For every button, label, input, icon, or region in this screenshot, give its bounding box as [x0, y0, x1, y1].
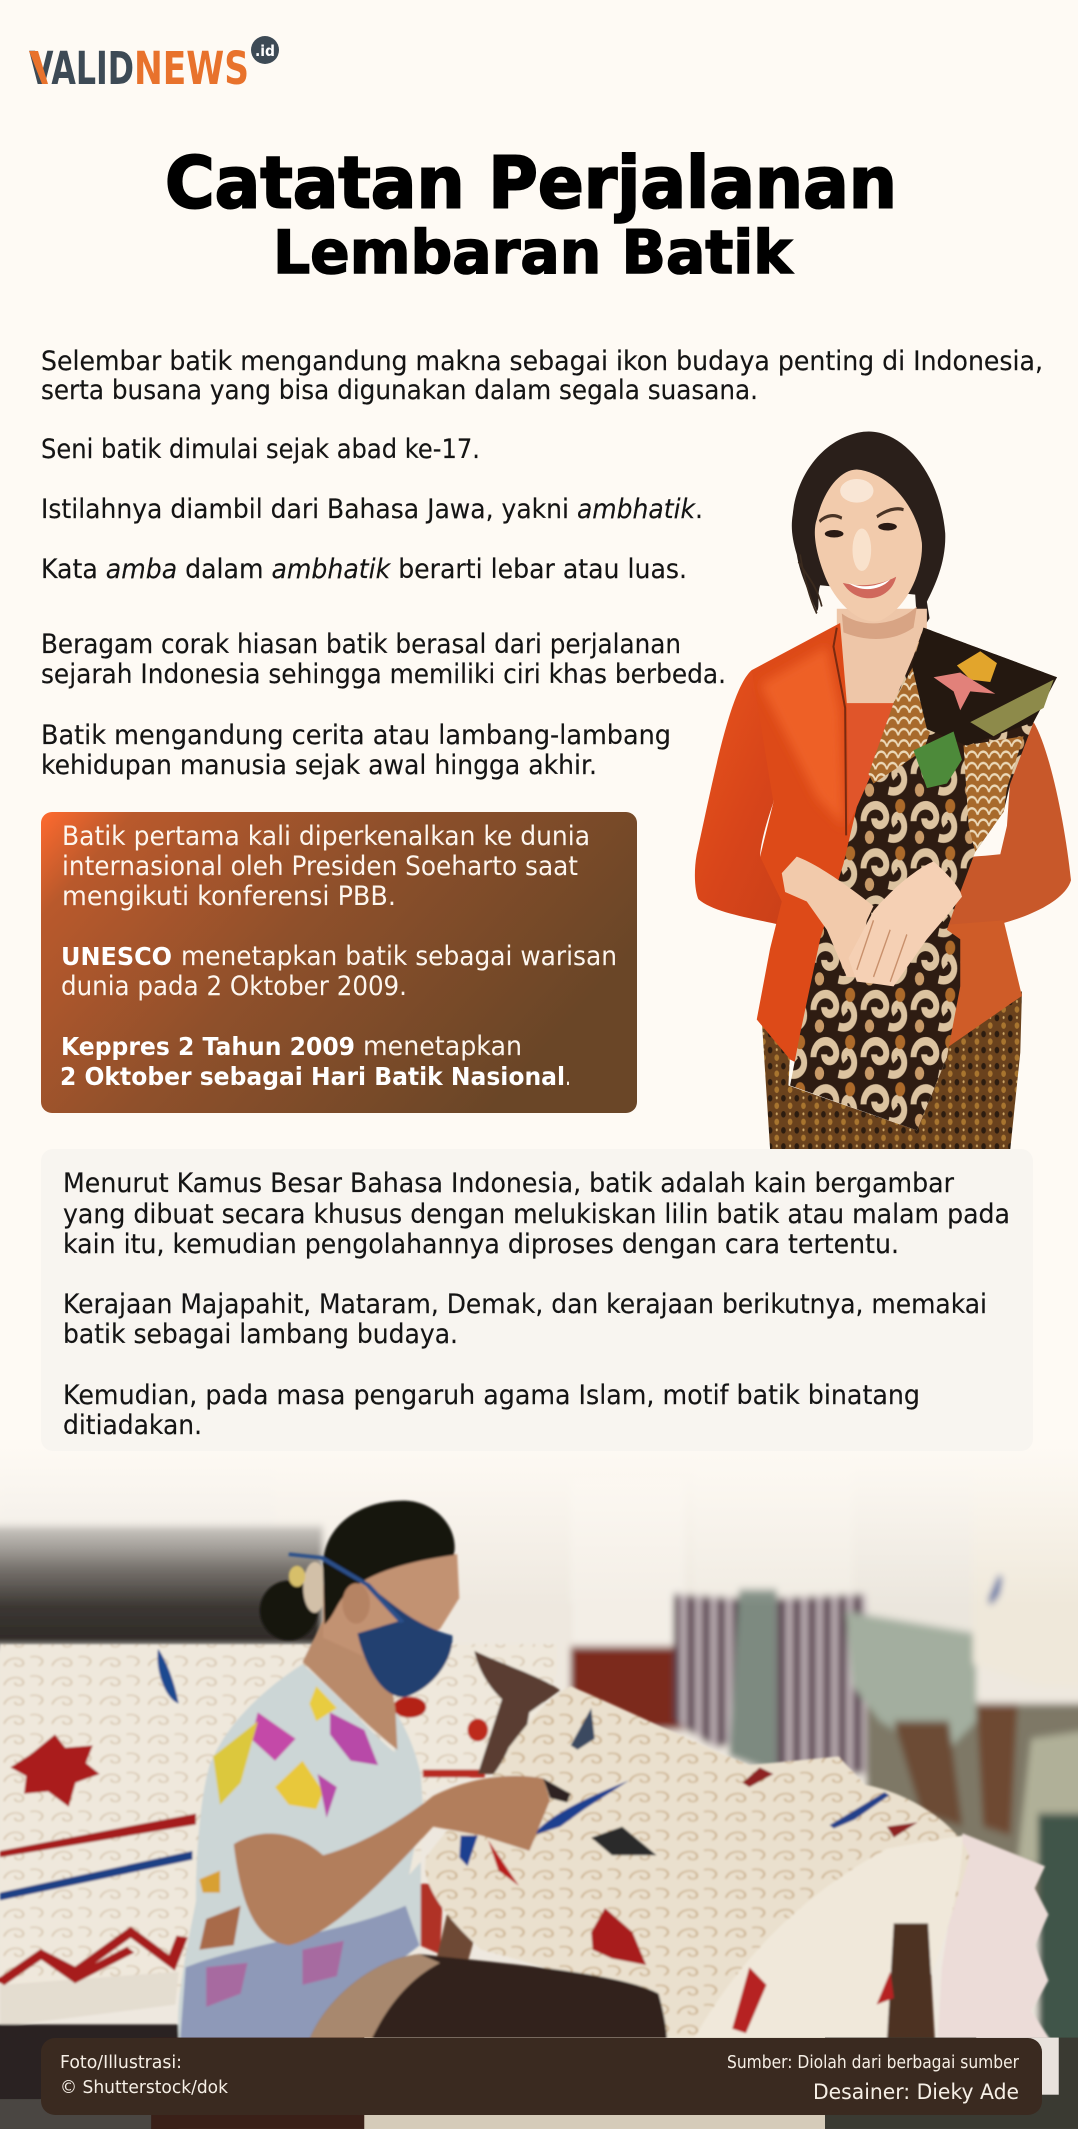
panel: batik history callout: [41, 812, 637, 1113]
title: [165, 142, 897, 288]
intro text block: Seni batik dimulai sejak abad ke-17.: [41, 434, 480, 465]
panel: batik history callout: menetapkan: [363, 1031, 522, 1062]
text block: corak batik: Beragam corak hiasan batik berasal dari perjalanan: [41, 629, 681, 660]
panel: batik history callout: dunia pada 2 Oktober 2009.: [61, 971, 407, 1002]
panel: KBBI definition text: Kerajaan Majapahit, Mataram, Demak, dan kerajaan berikutnya, memakai: [63, 1289, 987, 1320]
text block: corak batik: Batik mengandung cerita atau lambang-lambang: [41, 720, 671, 751]
text block: corak batik: [41, 629, 726, 781]
footer bar: credits: Desainer: Dieky Ade: [813, 2080, 1019, 2104]
panel: batik history callout: Keppres 2 Tahun 2009: [61, 1032, 355, 1061]
intro text block: serta busana yang bisa digunakan dalam segala suasana.: [41, 375, 758, 406]
illustration: woman in orange kebaya with batik sash: [695, 431, 1071, 1149]
panel: batik history callout: UNESCO: [61, 942, 172, 971]
panel: batik history callout: menetapkan batik sebagai warisan: [181, 941, 617, 972]
footer bar: credits: [41, 2038, 1042, 2115]
panel: batik history callout: Batik pertama kali diperkenalkan ke dunia: [62, 821, 590, 852]
logo: Validnews.id: .id: [255, 42, 275, 60]
logo: Validnews.id: VALID: [29, 42, 134, 95]
title: Catatan Perjalanan: [165, 142, 897, 224]
logo: Validnews.id: [29, 36, 279, 95]
panel: batik history callout: .: [565, 1061, 571, 1092]
panel: KBBI definition text: yang dibuat secara khusus dengan melukiskan lilin batik atau malam pada: [63, 1199, 1010, 1230]
panel: KBBI definition text: Menurut Kamus Besar Bahasa Indonesia, batik adalah kain bergambar: [63, 1168, 954, 1199]
text block: corak batik: sejarah Indonesia sehingga memiliki ciri khas berbeda.: [41, 659, 726, 690]
text block: corak batik: kehidupan manusia sejak awal hingga akhir.: [41, 750, 597, 781]
panel: batik history callout: mengikuti konferensi PBB.: [62, 881, 396, 912]
footer bar: credits: Foto/Illustrasi:: [60, 2052, 182, 2073]
panel: KBBI definition text: Kemudian, pada masa pengaruh agama Islam, motif batik binatang: [63, 1380, 920, 1411]
panel: KBBI definition text: batik sebagai lambang budaya.: [63, 1319, 458, 1350]
footer bar: credits: Sumber: Diolah dari berbagai sumber: [727, 2052, 1020, 2073]
panel: KBBI definition text: kain itu, kemudian pengolahannya diproses dengan cara tertentu.: [63, 1229, 899, 1260]
title: Lembaran Batik: [273, 218, 794, 288]
intro text block: Selembar batik mengandung makna sebagai ikon budaya penting di Indonesia,: [41, 346, 1043, 377]
panel: batik history callout: internasional oleh Presiden Soeharto saat: [62, 851, 578, 882]
footer bar: credits: © Shutterstock/dok: [60, 2077, 229, 2098]
photo: batik artisan at work: [0, 1374, 1078, 2129]
intro text block: Istilahnya diambil dari Bahasa Jawa, yakni ambhatik.: [41, 494, 703, 525]
panel: KBBI definition text: ditiadakan.: [63, 1410, 202, 1441]
logo: Validnews.id: NEWS: [134, 42, 249, 95]
intro text block: Kata amba dalam ambhatik berarti lebar atau luas.: [41, 554, 687, 585]
panel: KBBI definition text: [41, 1149, 1033, 1451]
panel: batik history callout: 2 Oktober sebagai Hari Batik Nasional: [60, 1062, 565, 1091]
intro text block: [41, 346, 1043, 585]
